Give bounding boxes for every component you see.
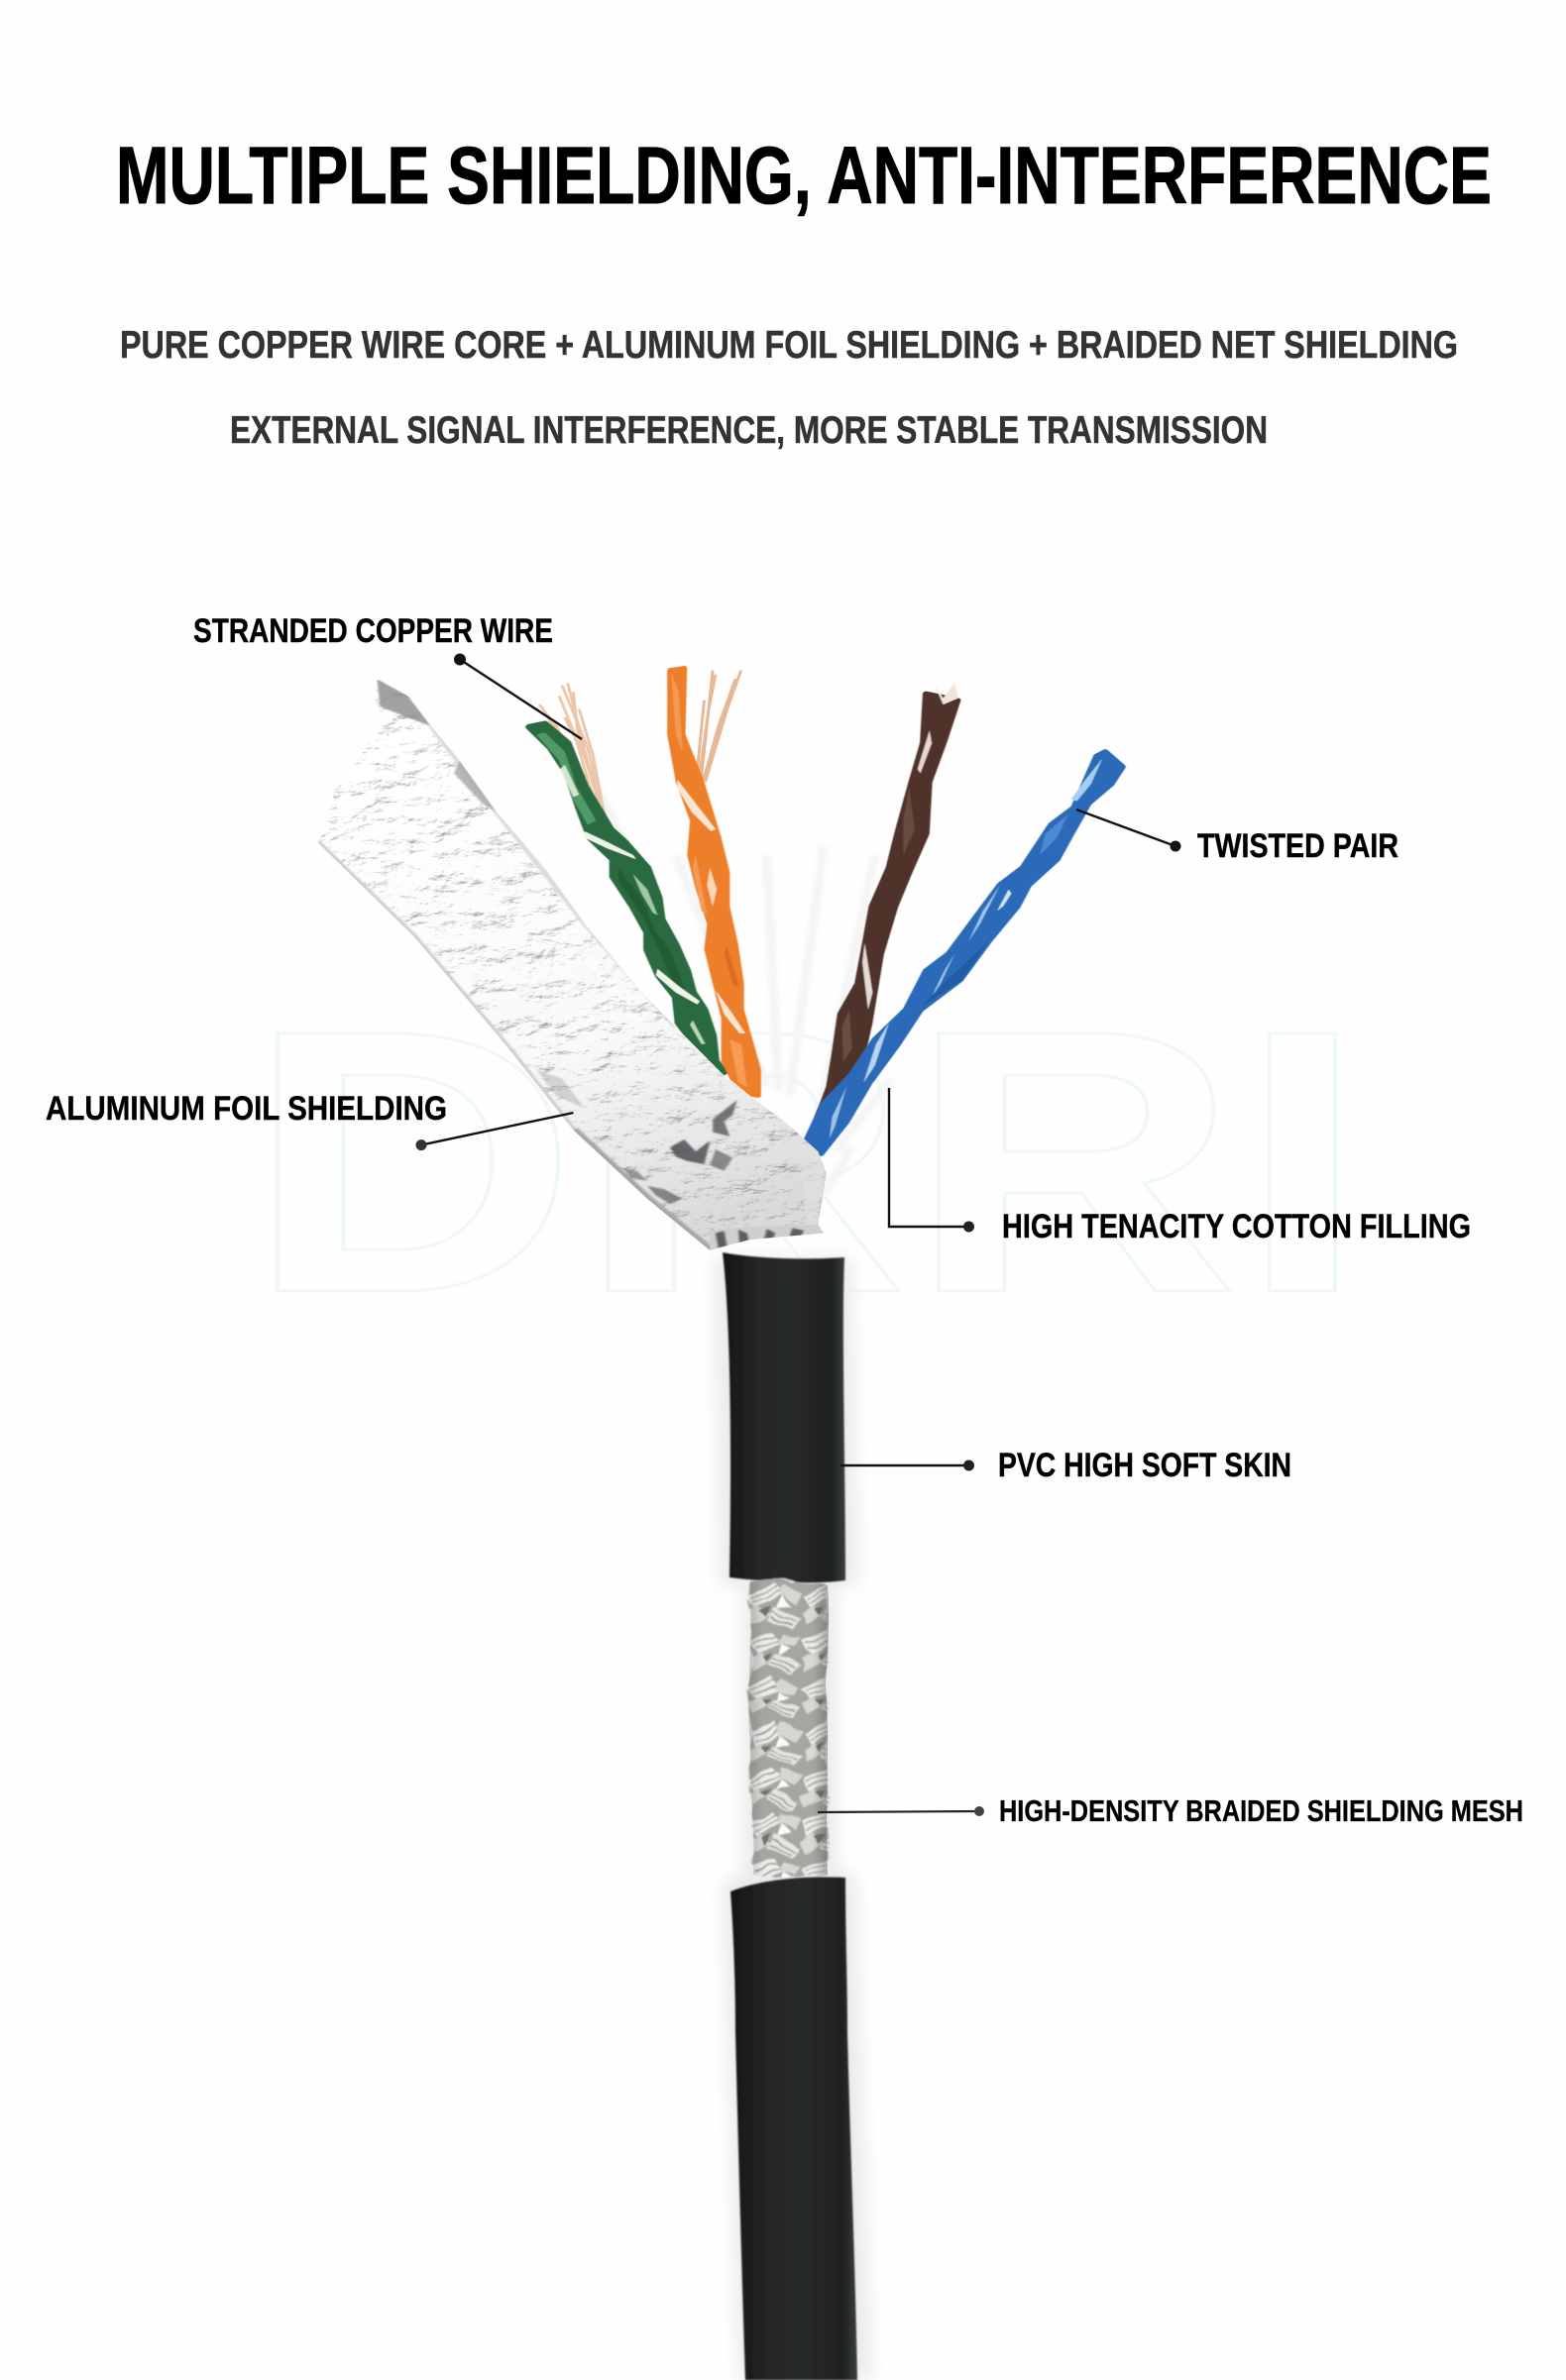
foil collar above jacket: [710, 1225, 824, 1250]
callout: PVC high soft skin: PVC HIGH SOFT SKIN: [998, 1447, 1291, 1484]
callout: stranded copper wire: [193, 612, 582, 739]
callout: twisted pair: [1076, 810, 1398, 865]
copper strands: green pair: [539, 683, 608, 825]
cotton filling fibres: [596, 786, 892, 1194]
callout: twisted pair: TWISTED PAIR: [1197, 827, 1398, 865]
foil edge shading: [317, 842, 573, 1130]
callout: aluminum foil shielding: ALUMINUM FOIL SHIELDING: [46, 1090, 447, 1128]
cable soft shadow: [714, 1258, 872, 2380]
subtitle text block: EXTERNAL SIGNAL INTERFERENCE, MORE STABLE TRANSMISSION: [230, 409, 1268, 452]
subtitle text block: [120, 324, 1458, 452]
foil highlights and dark creases: [377, 679, 824, 1225]
cable illustration: [306, 668, 1122, 2380]
aluminum foil: [306, 670, 846, 1259]
exposed wires and foil: [306, 668, 1122, 1259]
callout: high tenacity cotton filling: [889, 1088, 1471, 1245]
callout: PVC high soft skin: [840, 1447, 1291, 1484]
wire: blue pair: [807, 752, 1122, 1153]
upper PVC jacket: [723, 1252, 845, 1582]
copper strands: orange pair: [698, 670, 741, 782]
wire: brown pair: [818, 683, 958, 1117]
watermark: DRRI: DRRI: [247, 953, 1366, 1371]
wire: green pair: [529, 724, 725, 1072]
lower PVC jacket: [730, 1877, 857, 2380]
callout: stranded copper wire: STRANDED COPPER WIRE: [193, 612, 553, 650]
braided shielding mesh: [748, 1579, 829, 1879]
callout: high tenacity cotton filling: HIGH TENACITY COTTON FILLING: [1002, 1208, 1471, 1245]
callout: aluminum foil shielding: [46, 1090, 573, 1150]
wire: orange pair: [670, 668, 758, 1096]
